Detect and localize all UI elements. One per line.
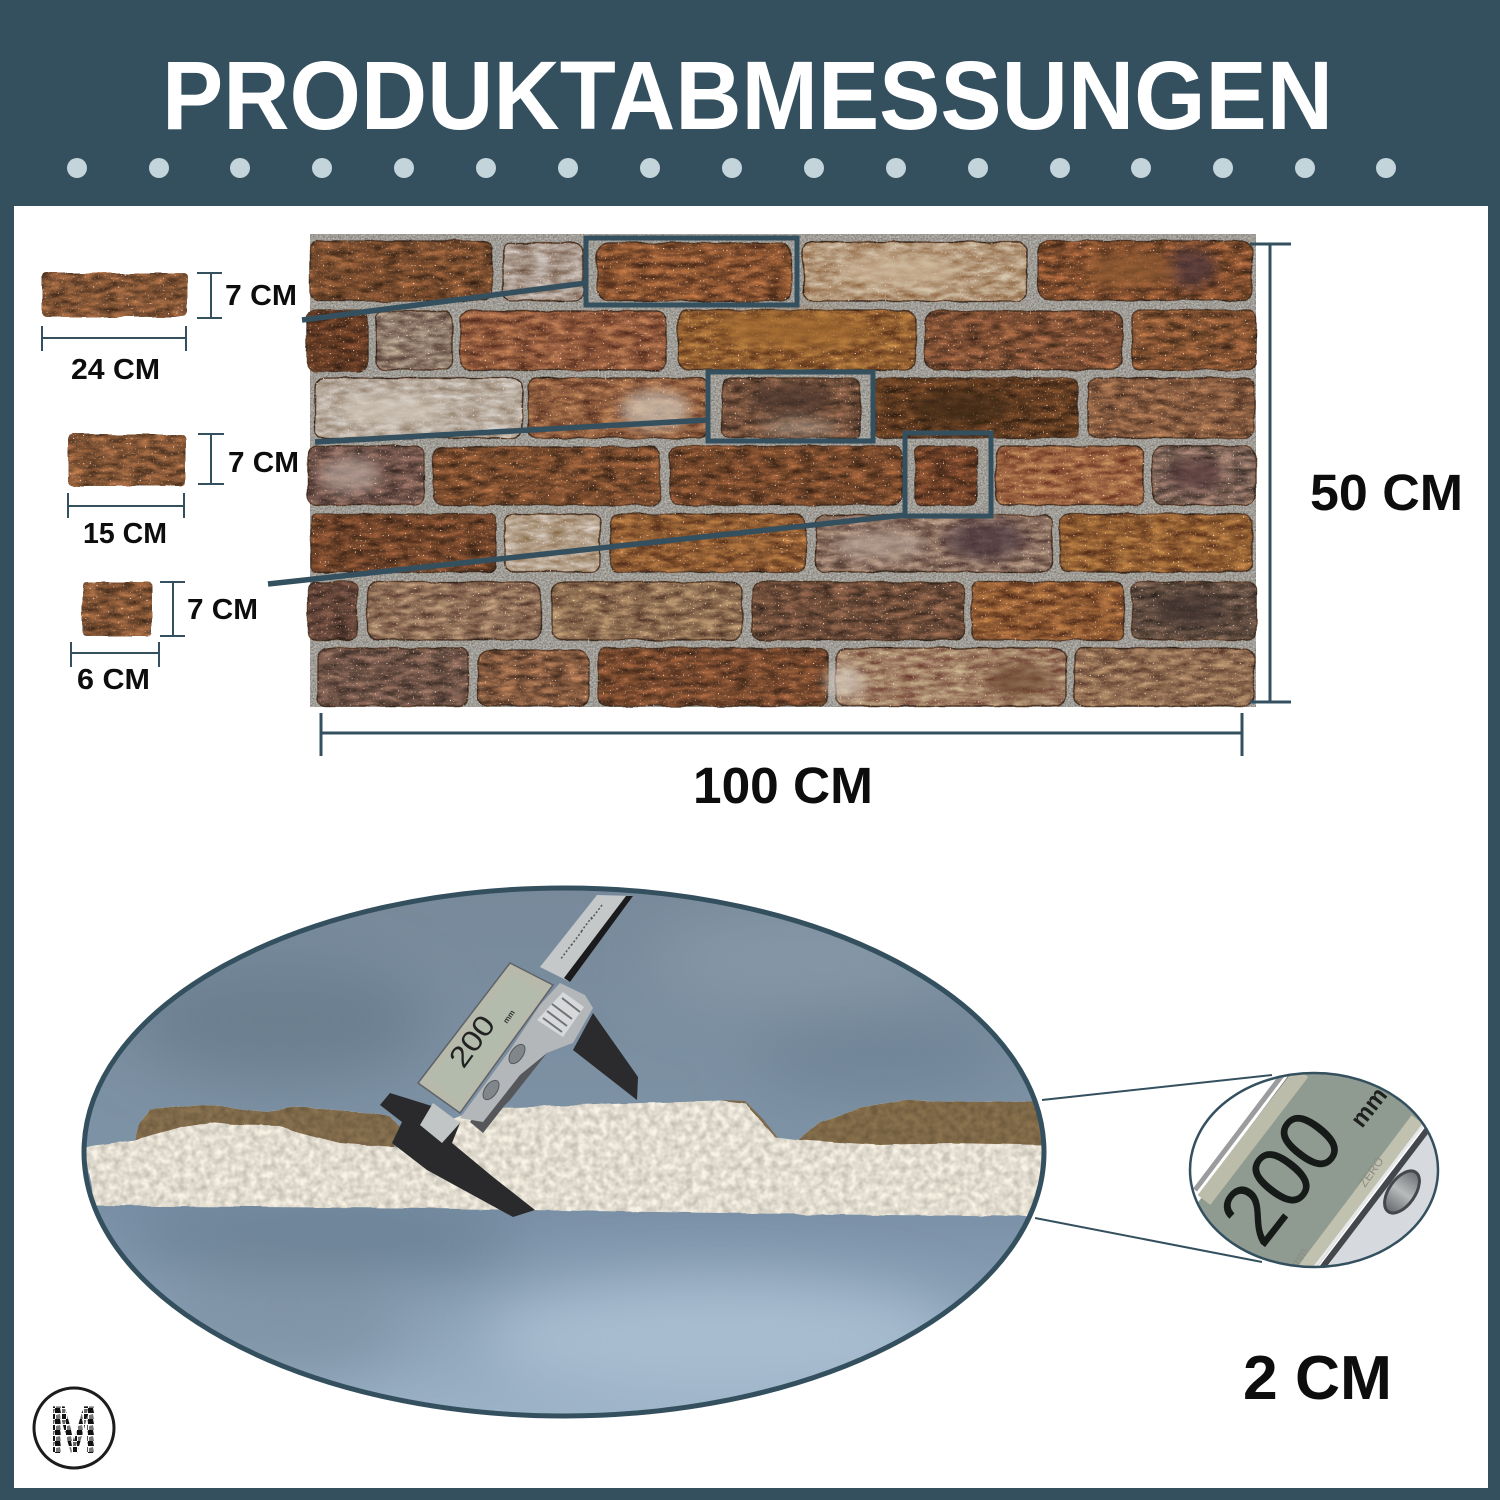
brick wall panel <box>307 234 1256 707</box>
width dimension <box>71 642 159 667</box>
dimension line <box>321 713 1242 756</box>
brown crust right <box>798 1100 1046 1150</box>
mortar <box>310 234 1256 707</box>
logo ring <box>34 1388 114 1468</box>
height dimension <box>197 273 222 318</box>
display housing <box>418 963 553 1113</box>
lower jaw <box>380 1093 535 1217</box>
width label: 24 CM <box>71 354 160 386</box>
highlight box: 24 cm brick <box>586 238 797 305</box>
ruler scale ticks <box>560 905 602 960</box>
width dimension: 100 cm <box>321 713 1242 814</box>
zoom connector upper <box>1042 1075 1272 1100</box>
beige strip right <box>1305 1120 1418 1270</box>
thickness label: 2 CM <box>1243 1344 1392 1413</box>
grip ridges <box>543 998 580 1032</box>
ruler upper <box>540 895 633 982</box>
highlight box: 15 cm brick <box>708 372 873 441</box>
brick sample: 15 x 7 cm <box>68 434 299 550</box>
beige strip left <box>1204 1072 1302 1200</box>
width label: 15 CM <box>83 518 167 550</box>
brick swatch <box>82 582 152 636</box>
height dimension: 50 cm <box>1250 244 1463 702</box>
height label: 7 CM <box>228 447 299 479</box>
brick colour variation <box>320 248 1225 698</box>
label: 50 CM <box>1310 464 1463 521</box>
width dimension <box>42 326 186 351</box>
zoomed lcd reading: 200 <box>1199 1092 1362 1262</box>
white corner <box>1185 1070 1445 1270</box>
brick swatch <box>42 273 187 317</box>
height label: 7 CM <box>225 280 297 312</box>
backdrop <box>80 885 1050 1425</box>
brick sample: 6 x 7 cm <box>71 582 258 696</box>
leader line: 6 cm brick <box>268 515 905 584</box>
oval border <box>84 888 1044 1416</box>
bricks <box>307 241 1256 706</box>
dotted divider <box>67 158 1396 178</box>
digital caliper <box>380 895 638 1217</box>
label: 100 CM <box>693 757 873 814</box>
height dimension <box>160 582 185 636</box>
button upper <box>506 1042 528 1066</box>
silver panel <box>1329 1128 1437 1265</box>
thickness photo oval <box>80 885 1050 1425</box>
foam slab cross-section <box>84 1101 1046 1217</box>
brown crust notch <box>722 1100 778 1138</box>
dark trim right <box>1322 1130 1427 1268</box>
body shadow <box>470 1030 573 1133</box>
width dimension <box>68 493 184 518</box>
white trim <box>1314 1124 1424 1268</box>
brick sample: 24 x 7 cm <box>42 273 297 386</box>
logo letter: M <box>49 1392 99 1468</box>
height dimension <box>198 434 224 484</box>
lcd magnifier inset <box>1185 1070 1450 1275</box>
inset border <box>1190 1073 1438 1267</box>
button <box>1383 1169 1421 1215</box>
zoom connector lower <box>1035 1218 1262 1262</box>
oval content <box>80 885 1050 1425</box>
ruler lower <box>420 1103 460 1143</box>
title: PRODUKTABMESSUNGEN <box>162 41 1333 150</box>
lcd reading: 200 <box>443 1010 502 1074</box>
knurled grip <box>537 992 584 1037</box>
zero label: ZERO <box>1356 1154 1387 1190</box>
lcd unit: mm <box>501 1008 517 1025</box>
silver body <box>460 983 593 1122</box>
zoomed unit: mm <box>1345 1082 1393 1133</box>
bezel stripes left <box>1195 1074 1283 1190</box>
leader line: 15 cm brick <box>315 420 708 442</box>
brick swatch <box>68 434 186 486</box>
brown crust left <box>135 1105 402 1150</box>
dimension line <box>1250 244 1291 702</box>
width label: 6 CM <box>77 664 150 696</box>
leader line: 24 cm brick <box>302 283 586 320</box>
lcd screen <box>431 975 542 1102</box>
ruler edge <box>564 896 633 982</box>
upper jaw <box>573 1013 638 1100</box>
height label: 7 CM <box>187 594 258 626</box>
mm label bottom: mm <box>1288 1245 1311 1270</box>
highlight box: 6 cm brick <box>905 433 991 516</box>
button lower <box>480 1078 502 1102</box>
lcd area <box>1198 1074 1420 1265</box>
inset content <box>1194 1074 1437 1266</box>
brand logo <box>34 1388 114 1468</box>
